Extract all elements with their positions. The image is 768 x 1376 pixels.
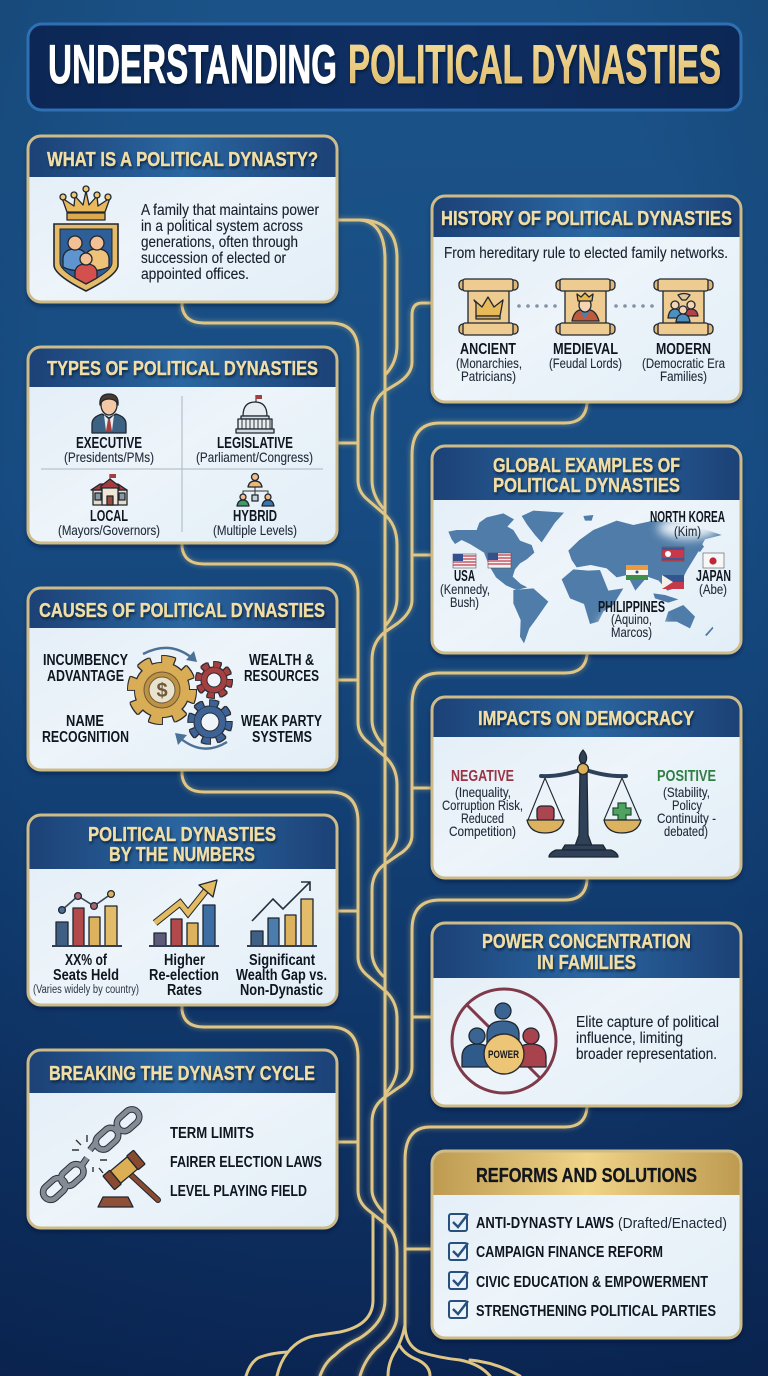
country labels: Marcos) <box>611 624 652 640</box>
country labels: (Kim) <box>674 523 701 539</box>
heading <box>493 455 680 497</box>
flag: Philippines <box>662 575 684 589</box>
country labels: NORTH KOREA <box>650 509 725 526</box>
heading: POWER CONCENTRATION <box>482 931 691 953</box>
chart: seats held: XX% of <box>65 952 108 969</box>
definition text: A family that maintains power <box>141 202 320 219</box>
heading: GLOBAL EXAMPLES OF <box>493 455 680 477</box>
country labels: Bush) <box>450 594 479 610</box>
type: local <box>58 474 160 538</box>
cause labels: INCUMBENCY <box>43 652 128 669</box>
type: local: (Mayors/Governors) <box>58 522 160 538</box>
panel: what is a political dynasty <box>28 136 337 302</box>
icon: interlocking gears: $ <box>156 680 168 702</box>
description text: Elite capture of political <box>576 1014 719 1031</box>
panel: breaking the dynasty cycle <box>28 1050 337 1228</box>
positive impacts: (Stability, <box>663 784 710 800</box>
heading: TYPES OF POLITICAL DYNASTIES <box>47 358 318 380</box>
reform list: LEVEL PLAYING FIELD <box>170 1183 307 1200</box>
heading <box>482 931 691 974</box>
panel: history of political dynasties <box>432 196 741 402</box>
type: executive <box>64 394 154 465</box>
cause labels: NAME <box>66 713 104 730</box>
chart: re-election rates: Higher <box>164 952 205 969</box>
reform: anti-dynasty laws: ANTI-DYNASTY LAWS <box>476 1215 614 1232</box>
positive impacts: POSITIVE <box>657 768 716 785</box>
reform list: TERM LIMITS <box>170 1125 254 1142</box>
heading: BREAKING THE DYNASTY CYCLE <box>49 1063 315 1085</box>
reform: strengthening parties <box>449 1301 716 1320</box>
heading: BY THE NUMBERS <box>109 844 255 866</box>
cause labels: RESOURCES <box>244 668 319 685</box>
definition text <box>141 202 320 283</box>
chart: wealth gap <box>236 882 327 999</box>
era: medieval <box>549 279 622 371</box>
positive impacts: Continuity - <box>657 810 716 826</box>
negative impacts: Corruption Risk, <box>442 797 523 813</box>
description text: influence, limiting <box>576 1030 683 1047</box>
gold connector network <box>182 220 587 1376</box>
chart: seats held: (Varies widely by country) <box>33 984 139 996</box>
negative impacts: NEGATIVE <box>451 768 514 785</box>
heading: POLITICAL DYNASTIES <box>88 824 276 846</box>
panel: impacts on democracy <box>432 697 741 878</box>
definition text: generations, often through <box>141 234 298 251</box>
negative impacts: Competition) <box>449 823 516 839</box>
heading: CAUSES OF POLITICAL DYNASTIES <box>39 600 325 622</box>
type: legislative: (Parliament/Congress) <box>196 449 313 465</box>
reform: anti-dynasty laws: (Drafted/Enacted) <box>618 1215 727 1232</box>
icon: no power concentration <box>452 989 556 1093</box>
era: medieval: (Feudal Lords) <box>549 355 622 371</box>
heading: REFORMS AND SOLUTIONS <box>476 1165 697 1187</box>
reform: civic education: CIVIC EDUCATION & EMPOWERMENT <box>476 1274 708 1291</box>
icon: broken chain and gavel <box>40 1106 158 1207</box>
era: ancient <box>456 279 522 384</box>
era: ancient: ANCIENT <box>460 341 516 358</box>
negative impacts: (Inequality, <box>455 784 511 800</box>
type: hybrid: HYBRID <box>233 508 277 525</box>
flag: India <box>626 565 648 580</box>
reform: civic education <box>449 1272 708 1291</box>
world map <box>448 511 722 643</box>
type: hybrid <box>213 474 297 538</box>
positive impacts: debated) <box>664 823 708 839</box>
cause labels: SYSTEMS <box>252 729 312 746</box>
heading <box>88 824 276 866</box>
country labels: PHILIPPINES <box>598 599 665 616</box>
type: local: LOCAL <box>90 508 128 525</box>
negative impacts: Reduced <box>461 810 504 826</box>
timeline dots <box>517 304 654 308</box>
chart: wealth gap: Significant <box>249 952 315 969</box>
negative impacts <box>442 768 523 839</box>
chart: re-election rates: Re-election <box>149 967 219 984</box>
era: modern: (Democratic Era <box>642 355 725 371</box>
type: executive: (Presidents/PMs) <box>64 449 154 465</box>
country labels: (Abe) <box>699 581 727 597</box>
cause labels <box>42 652 322 746</box>
definition text: in a political system across <box>141 218 303 235</box>
positive impacts <box>657 768 716 839</box>
reform: strengthening parties: STRENGTHENING POLITICAL PARTIES <box>476 1303 716 1320</box>
type: legislative: LEGISLATIVE <box>217 435 293 452</box>
era: modern: MODERN <box>656 341 711 358</box>
era: modern: Families) <box>660 368 707 384</box>
era: medieval: MEDIEVAL <box>553 341 618 358</box>
positive impacts: Policy <box>672 797 702 813</box>
type: executive: EXECUTIVE <box>76 435 142 452</box>
description text <box>576 1014 719 1063</box>
chart: wealth gap: Non-Dynastic <box>240 982 323 999</box>
panel: political dynasties by the numbers <box>28 815 337 1005</box>
chart: re-election rates <box>149 880 219 999</box>
chart: re-election rates: Rates <box>167 982 202 999</box>
cause labels: WEALTH & <box>249 652 314 669</box>
country labels: (Kennedy, <box>440 581 490 597</box>
era: ancient: (Monarchies, <box>456 355 522 371</box>
flag: North Korea <box>662 547 684 561</box>
label haze <box>600 517 718 639</box>
heading: WHAT IS A POLITICAL DYNASTY? <box>47 149 318 171</box>
panel: global examples of political dynasties <box>432 446 741 653</box>
panel: causes of political dynasties <box>28 588 337 770</box>
cause labels: WEAK PARTY <box>241 713 322 730</box>
reform list: FAIRER ELECTION LAWS <box>170 1154 322 1171</box>
panel: reforms and solutions <box>432 1151 741 1338</box>
definition text: succession of elected or <box>141 250 287 267</box>
chart: seats held <box>33 891 139 996</box>
country labels: (Aquino, <box>611 611 652 627</box>
chart: wealth gap: Wealth Gap vs. <box>236 967 327 984</box>
cause labels: RECOGNITION <box>42 729 129 746</box>
icon: interlocking gears <box>132 648 230 749</box>
title banner <box>28 24 741 110</box>
country labels: USA <box>454 568 475 585</box>
heading: IMPACTS ON DEMOCRACY <box>478 708 695 730</box>
country labels <box>440 509 731 640</box>
country labels: JAPAN <box>696 568 731 585</box>
reform: campaign finance <box>449 1243 663 1261</box>
panel: power concentration in families <box>432 923 741 1106</box>
title banner: UNDERSTANDING <box>48 33 337 95</box>
flag: USA <box>453 553 511 568</box>
flags and labels <box>440 509 731 640</box>
era: ancient: Patricians) <box>461 368 516 384</box>
reform: anti-dynasty laws <box>449 1214 727 1232</box>
description text: broader representation. <box>576 1046 717 1063</box>
type: hybrid: (Multiple Levels) <box>213 522 297 538</box>
icon: no power concentration: POWER <box>488 1049 519 1061</box>
reform: campaign finance: CAMPAIGN FINANCE REFORM <box>476 1244 663 1261</box>
definition text: appointed offices. <box>141 266 249 283</box>
icon: balance scale <box>527 750 641 857</box>
reform list <box>170 1125 322 1200</box>
chart: seats held: Seats Held <box>53 967 119 984</box>
era: modern <box>642 279 725 384</box>
heading: POLITICAL DYNASTIES <box>493 475 680 497</box>
type: legislative <box>196 395 313 465</box>
panel: types of political dynasties <box>28 347 337 543</box>
flag: Japan <box>703 553 724 568</box>
cause labels: ADVANTAGE <box>47 668 124 685</box>
icon: crowned family shield <box>54 186 118 291</box>
heading: IN FAMILIES <box>537 952 636 974</box>
